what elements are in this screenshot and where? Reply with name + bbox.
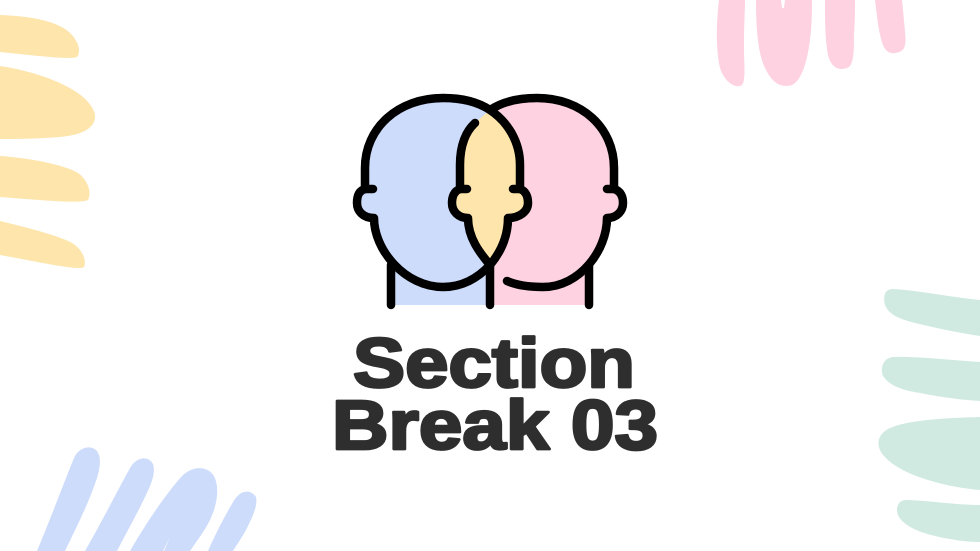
title line 2: Break 03 <box>332 386 658 464</box>
title <box>332 324 658 464</box>
left head fill <box>357 98 490 305</box>
brush strokes: green, right side <box>878 289 980 542</box>
right head fill <box>490 98 623 305</box>
icon: two overlapping heads <box>357 98 623 305</box>
title line 1: Section <box>353 324 635 402</box>
head outlines <box>357 98 623 305</box>
overlap fill <box>452 110 528 265</box>
brush strokes: pink, top right <box>717 0 905 86</box>
brush strokes: blue, bottom left <box>37 447 256 551</box>
brush strokes: yellow, top left <box>0 15 95 268</box>
